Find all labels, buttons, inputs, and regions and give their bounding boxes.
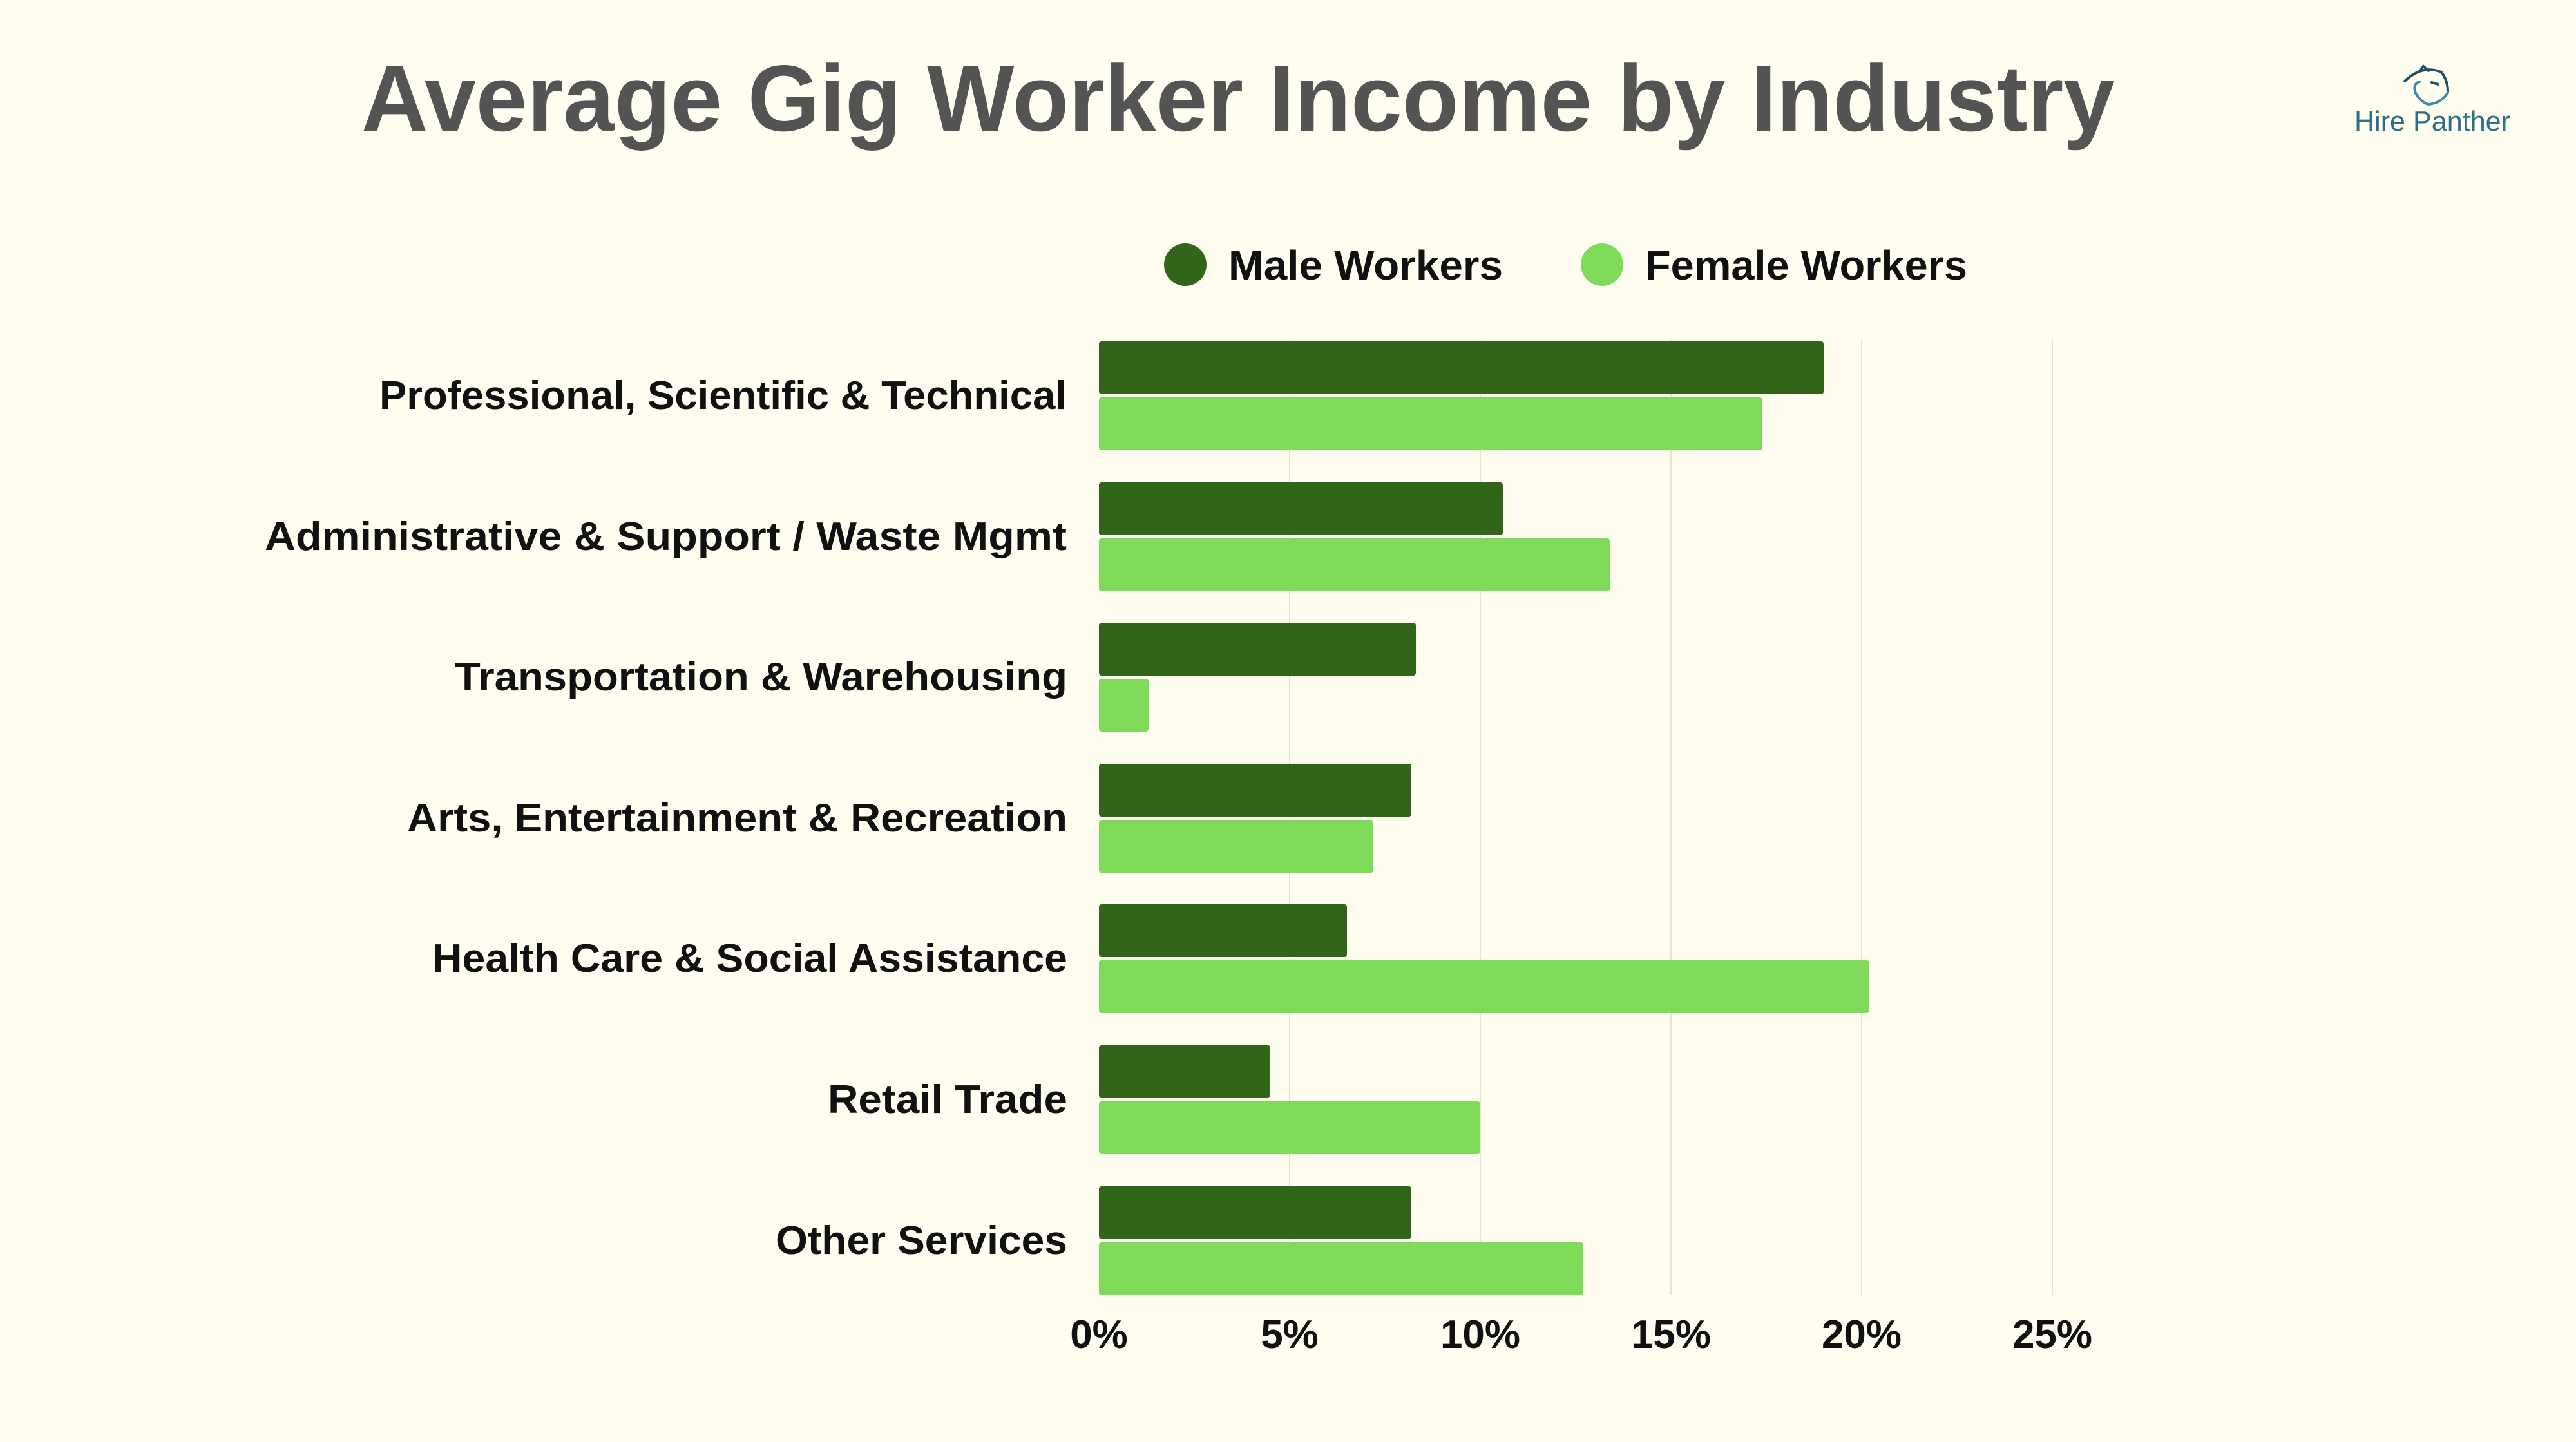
bars: Administrative xyxy=(1099,482,1610,591)
bars: Arts xyxy=(1099,764,1411,873)
bars: Other Services xyxy=(1099,1186,1583,1295)
category labels: Administrative & Support / Waste Mgmt xyxy=(265,515,1067,559)
category labels: Health Care & Social Assistance xyxy=(432,936,1067,981)
bars: Health Care xyxy=(1099,904,1869,1013)
x-axis labels: 15% xyxy=(1631,1313,1711,1357)
gridlines xyxy=(1290,340,2052,1295)
x-axis labels xyxy=(1070,1313,2092,1357)
x-axis labels: 10% xyxy=(1440,1313,1520,1357)
bars: Professional xyxy=(1099,341,1824,450)
icon: panther head xyxy=(2405,66,2448,104)
x-axis labels: 5% xyxy=(1261,1313,1319,1357)
category labels: Arts, Entertainment & Recreation xyxy=(407,796,1067,840)
logo: HirePanther xyxy=(2354,66,2510,137)
legend: Female Workers xyxy=(1645,242,1967,289)
logo text: Hire Panther xyxy=(2354,106,2510,137)
bar chart xyxy=(1099,341,1869,1295)
legend xyxy=(1164,242,1967,289)
legend: Male Workers xyxy=(1228,242,1503,289)
title: Average Gig Worker Income by Industry xyxy=(361,46,2115,151)
category labels: Other Services xyxy=(776,1219,1067,1263)
x-axis labels: 0% xyxy=(1070,1313,1128,1357)
bars: Retail xyxy=(1099,1045,1480,1154)
bars: Transportation xyxy=(1099,623,1416,732)
category labels: Retail Trade xyxy=(828,1077,1067,1122)
x-axis labels: 20% xyxy=(1822,1313,1902,1357)
category labels xyxy=(265,374,1067,1263)
category labels: Professional, Scientific & Technical xyxy=(379,374,1067,418)
x-axis labels: 25% xyxy=(2012,1313,2092,1357)
category labels: Transportation & Warehousing xyxy=(455,655,1067,699)
